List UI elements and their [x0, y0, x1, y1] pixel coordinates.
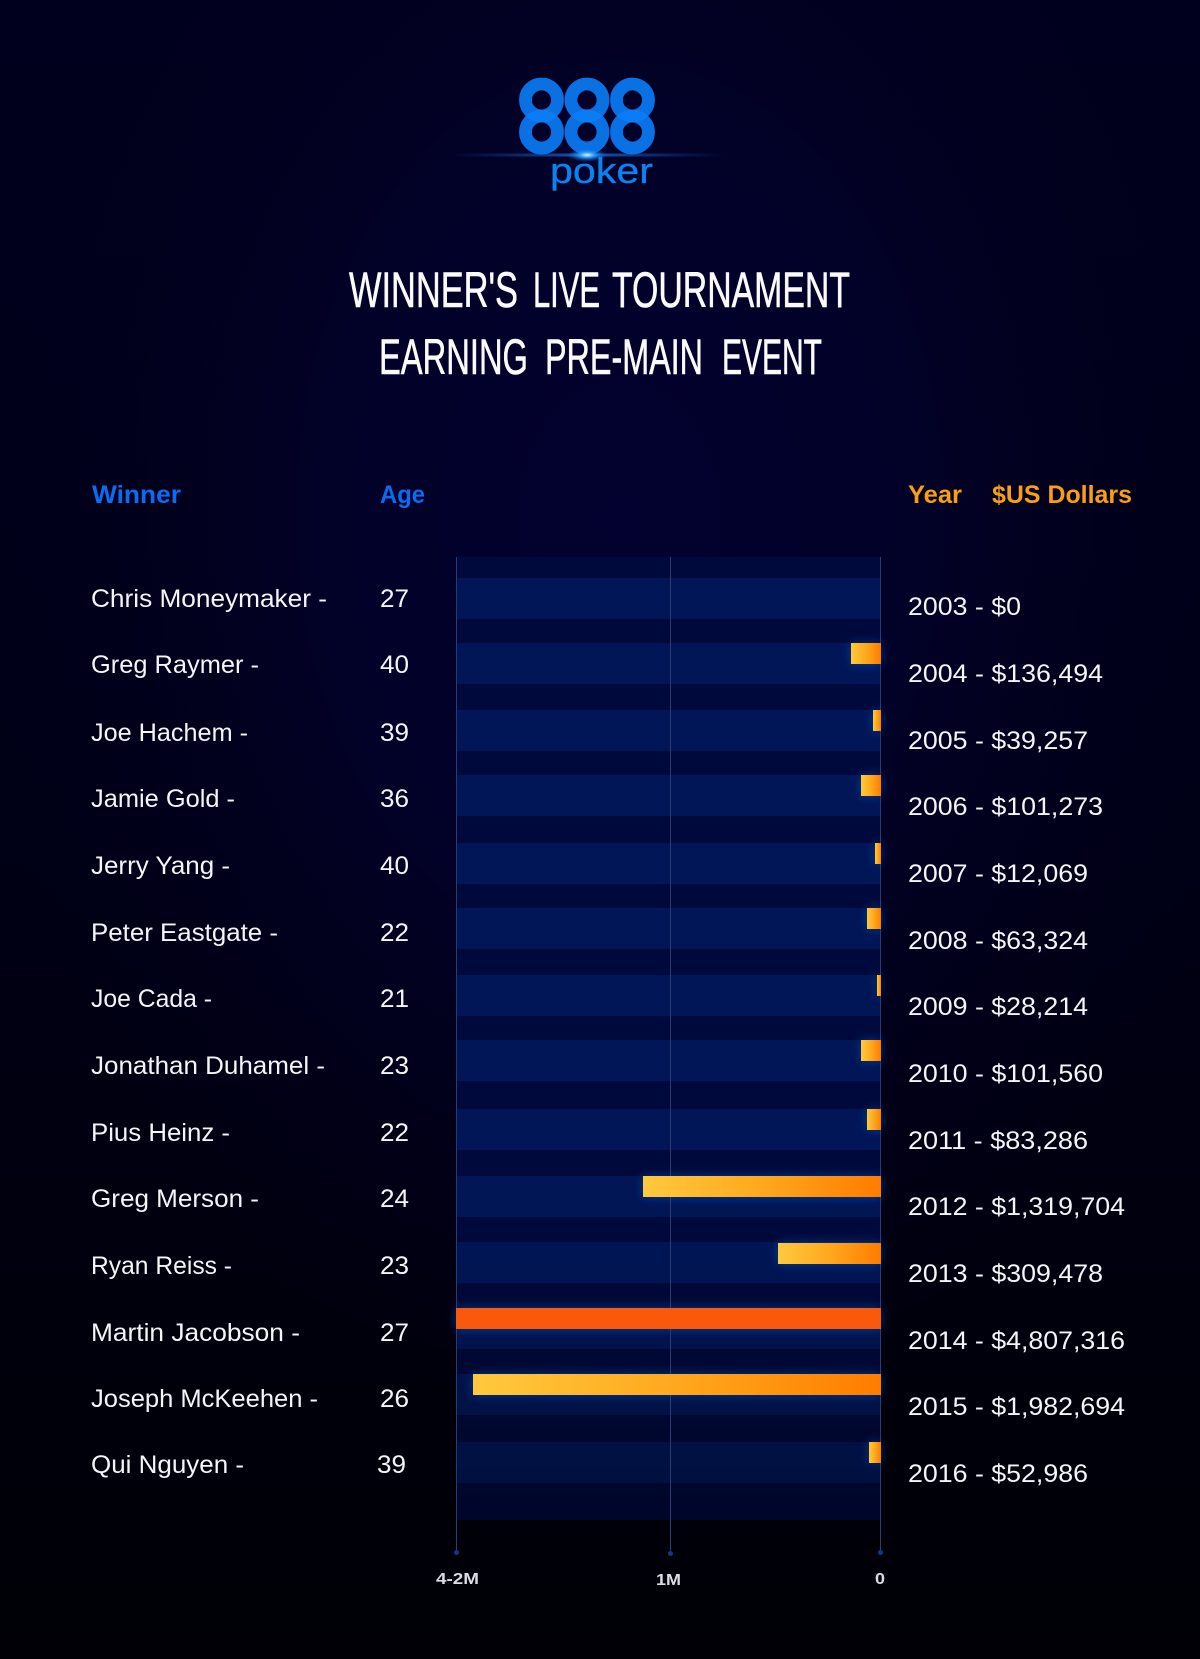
winner names: Peter Eastgate -: [91, 919, 278, 947]
year and dollar values: 2015 - $1,982,694: [908, 1393, 1125, 1421]
ages: 36: [380, 785, 409, 813]
column headings: Winner: [92, 481, 181, 509]
ages: 22: [380, 1119, 409, 1147]
axis labels: 1M: [656, 1572, 681, 1589]
year and dollar values: [908, 593, 1125, 1488]
winner names: Greg Merson -: [91, 1185, 259, 1213]
column headings: [92, 481, 1132, 509]
winner names: Joseph McKeehen -: [91, 1385, 318, 1413]
axis labels: 4-2M: [436, 1571, 479, 1588]
year and dollar values: 2012 - $1,319,704: [908, 1193, 1125, 1221]
axis lines: [456, 557, 880, 1553]
year and dollar values: 2005 - $39,257: [908, 727, 1088, 755]
title: EVENT: [722, 329, 822, 385]
winner names: Pius Heinz -: [91, 1119, 230, 1147]
ages: 21: [380, 985, 409, 1013]
title: LIVE: [533, 262, 600, 318]
title: WINNER'S: [349, 262, 518, 318]
title: PRE-MAIN: [545, 329, 703, 385]
year and dollar values: 2004 - $136,494: [908, 660, 1103, 688]
winner names: Chris Moneymaker -: [91, 585, 327, 613]
logo: 888 poker: poker: [550, 150, 653, 191]
winner names: Qui Nguyen -: [91, 1451, 244, 1479]
winner names: Joe Hachem -: [91, 719, 248, 747]
title: EARNING: [379, 329, 528, 385]
title: TOURNAMENT: [612, 262, 850, 318]
bars: [456, 643, 881, 1463]
winner names: Joe Cada -: [91, 985, 212, 1013]
chart background bands: [456, 557, 881, 1520]
ages: 26: [380, 1385, 409, 1413]
year and dollar values: 2006 - $101,273: [908, 793, 1103, 821]
column headings: Age: [380, 481, 425, 509]
year and dollar values: 2010 - $101,560: [908, 1060, 1103, 1088]
ages: 22: [380, 919, 409, 947]
bar chart: [436, 557, 885, 1589]
year and dollar values: 2007 - $12,069: [908, 860, 1088, 888]
year and dollar values: 2013 - $309,478: [908, 1260, 1103, 1288]
year and dollar values: 2011 - $83,286: [908, 1127, 1088, 1155]
title: [349, 262, 850, 385]
ages: 23: [380, 1252, 409, 1280]
column headings: Year: [908, 481, 962, 509]
year and dollar values: 2003 - $0: [908, 593, 1021, 621]
winner names: Jonathan Duhamel -: [91, 1052, 325, 1080]
year and dollar values: 2016 - $52,986: [908, 1460, 1088, 1488]
axis dots: [454, 1550, 883, 1556]
year and dollar values: 2009 - $28,214: [908, 993, 1088, 1021]
axis labels: [436, 1571, 885, 1589]
winner names: Jamie Gold -: [91, 785, 235, 813]
bar glows: [456, 643, 881, 1463]
ages: 39: [380, 719, 409, 747]
year and dollar values: 2014 - $4,807,316: [908, 1327, 1125, 1355]
axis labels: 0: [875, 1571, 885, 1588]
winner names: Greg Raymer -: [91, 651, 259, 679]
winner names: [91, 585, 327, 1479]
ages: 27: [380, 1319, 409, 1347]
logo: 888 poker: [450, 84, 725, 191]
winner names: Martin Jacobson -: [91, 1319, 300, 1347]
ages: 27: [380, 585, 409, 613]
ages: 40: [380, 651, 409, 679]
column headings: $US Dollars: [992, 481, 1132, 509]
ages: 23: [380, 1052, 409, 1080]
winner names: Ryan Reiss -: [91, 1252, 232, 1280]
ages: 24: [380, 1185, 409, 1213]
year and dollar values: 2008 - $63,324: [908, 927, 1088, 955]
ages: 39: [377, 1451, 406, 1479]
winner names: Jerry Yang -: [91, 852, 230, 880]
ages: [377, 585, 409, 1479]
ages: 40: [380, 852, 409, 880]
